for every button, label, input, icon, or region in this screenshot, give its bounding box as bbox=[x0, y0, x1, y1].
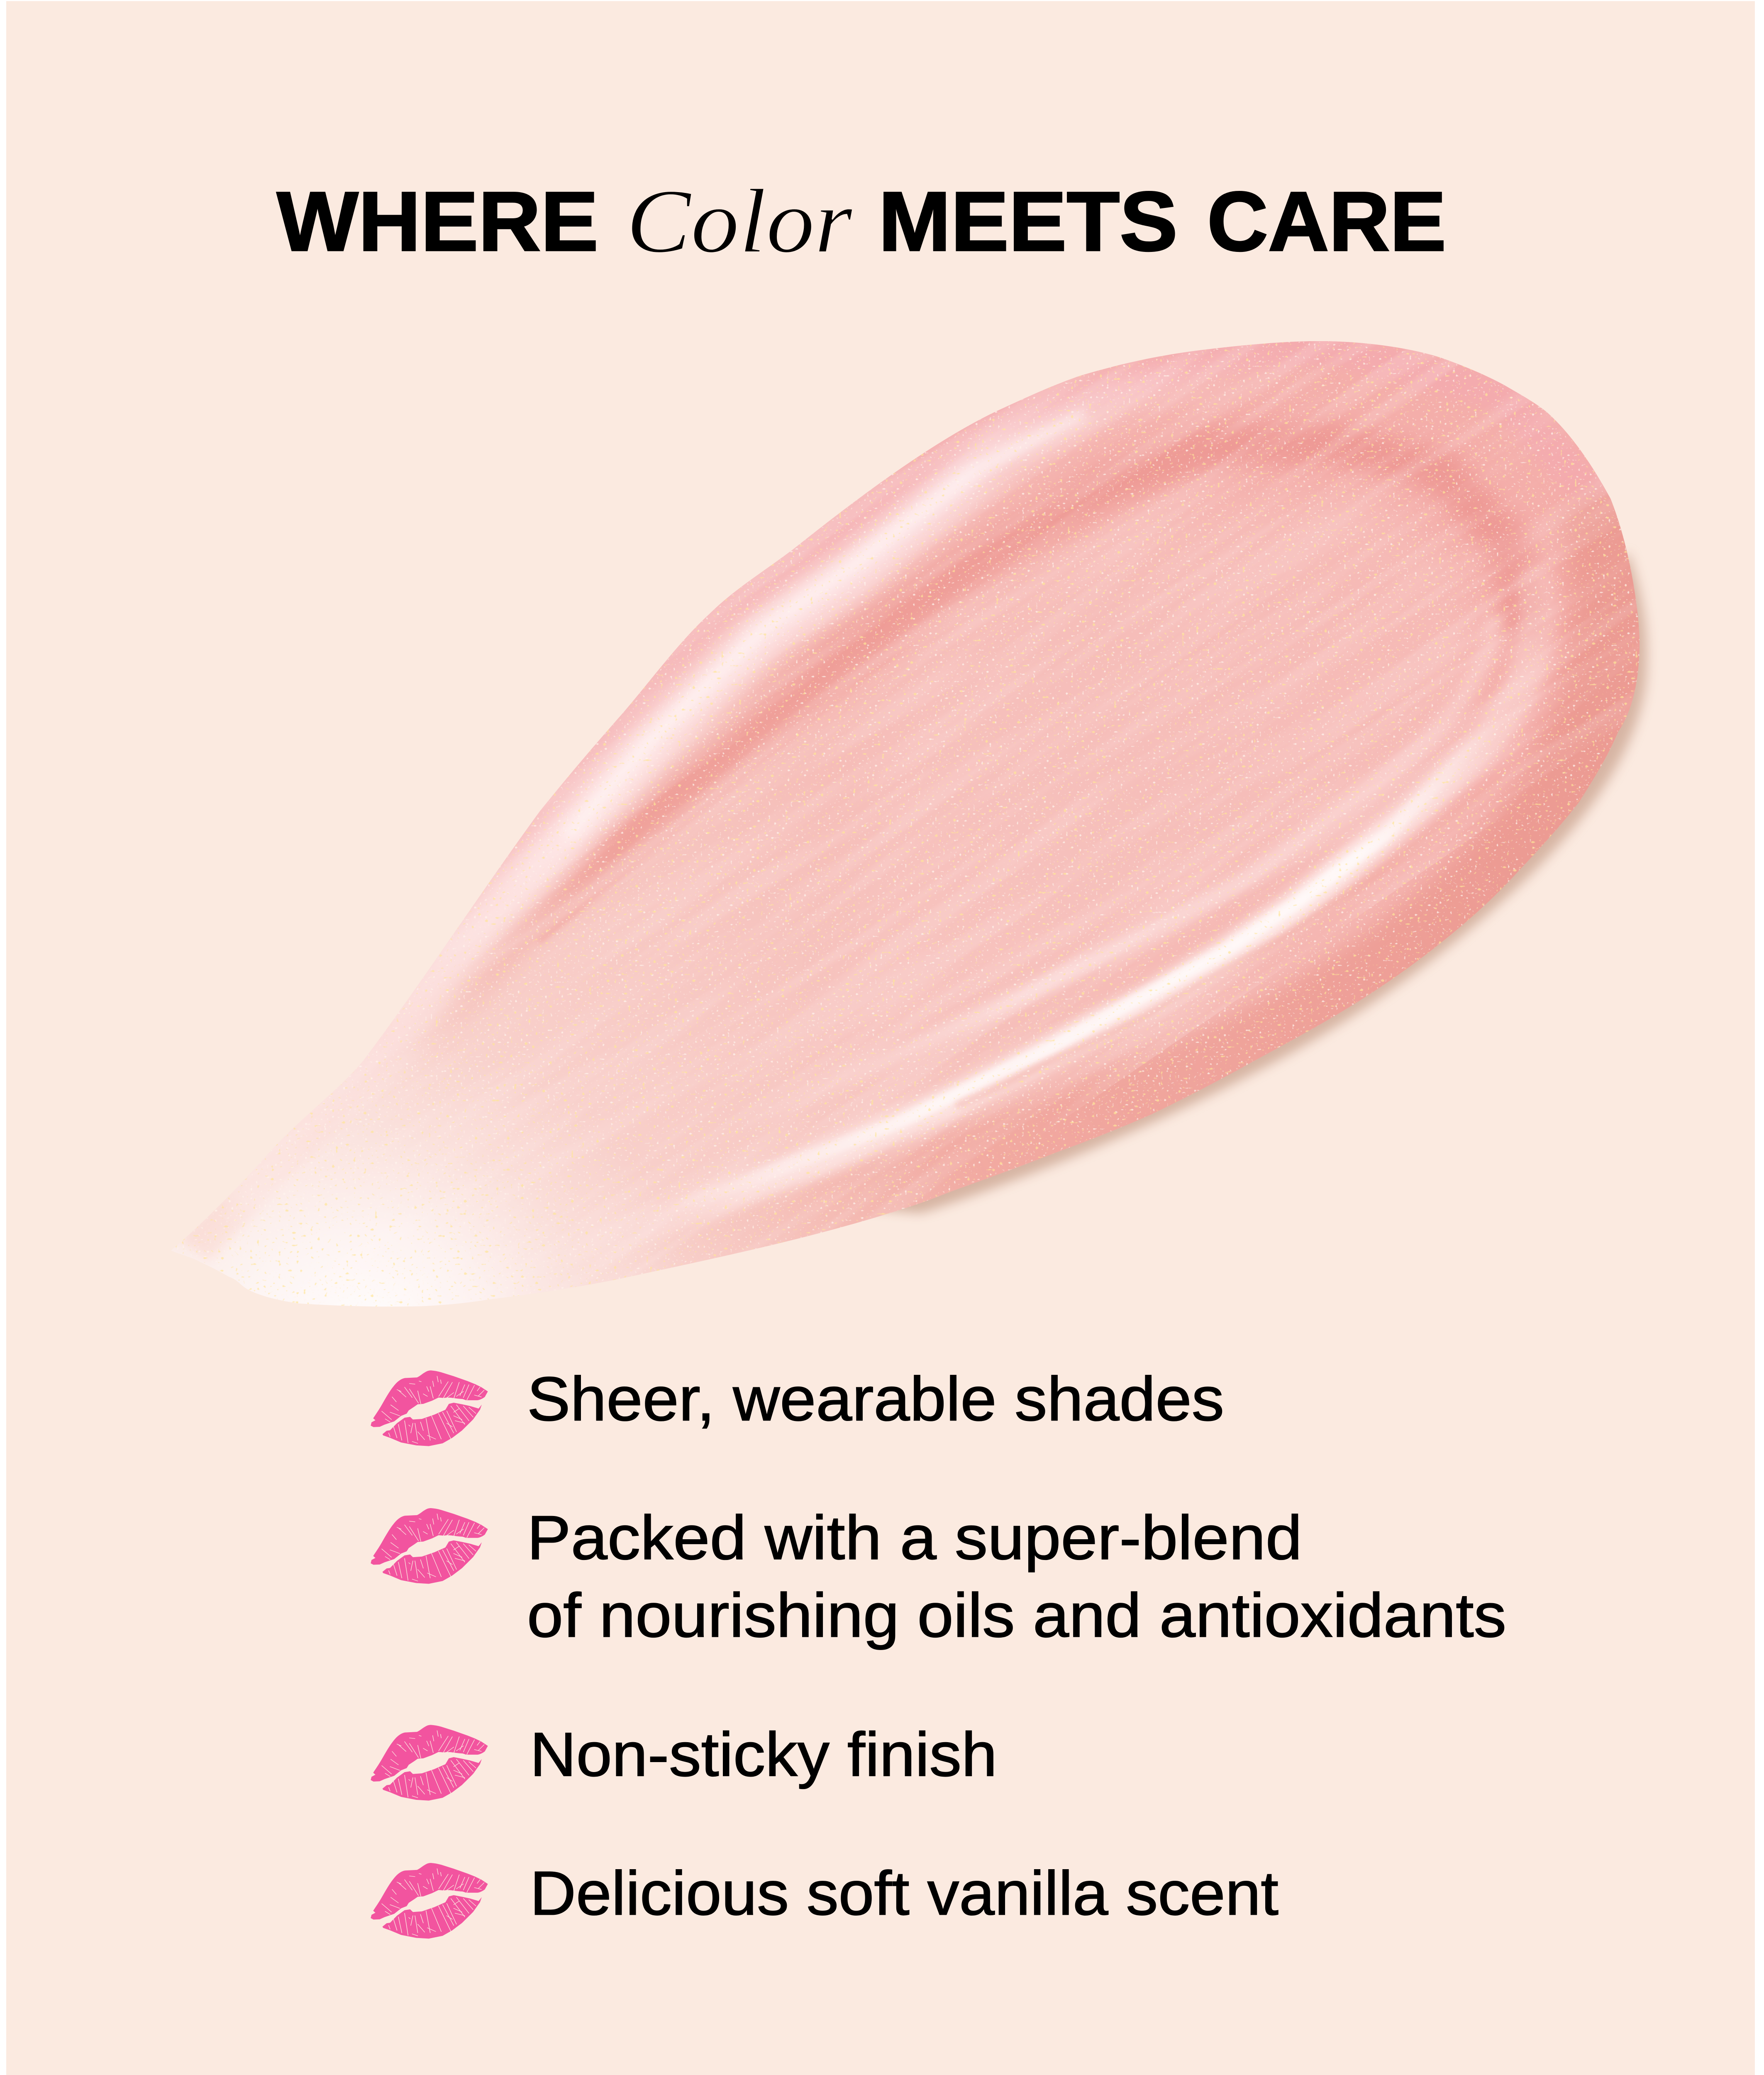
gold glitter bbox=[150, 331, 1649, 1317]
title: WHERE bbox=[277, 174, 598, 269]
feature: non-sticky bbox=[371, 1719, 997, 1801]
text: Sheer, wearable shades bbox=[527, 1364, 1224, 1433]
swatch shadow bbox=[757, 550, 1647, 1213]
text: of nourishing oils and antioxidants bbox=[527, 1580, 1506, 1650]
white glitter bbox=[150, 331, 1649, 1317]
title: MEETS bbox=[878, 174, 1178, 269]
icon: lips bbox=[371, 1370, 488, 1446]
right-to-lower ridge highlight bbox=[585, 582, 1538, 1250]
text: Delicious soft vanilla scent bbox=[530, 1858, 1278, 1928]
icon: lips bbox=[371, 1508, 488, 1584]
icon: lips bbox=[371, 1863, 488, 1938]
second inner ridge highlight bbox=[750, 622, 1494, 1125]
outer rim bbox=[195, 347, 1605, 1250]
title: Color bbox=[626, 171, 853, 272]
white tip fade bbox=[150, 1032, 780, 1317]
groove band bbox=[398, 443, 1527, 1079]
lip gloss swatch bbox=[171, 341, 1653, 1306]
feature: vanilla scent bbox=[371, 1858, 1278, 1938]
title: CARE bbox=[1207, 174, 1446, 269]
title bbox=[277, 171, 1446, 272]
upper highlight core bbox=[570, 417, 1080, 834]
upper highlight bbox=[247, 371, 1350, 1191]
text: Non-sticky finish bbox=[530, 1719, 997, 1789]
lower highlight core bbox=[690, 721, 1500, 1204]
groove crease line bbox=[540, 505, 1114, 941]
ridge shadow line bbox=[960, 781, 1500, 1105]
inner pool tint bbox=[840, 494, 1478, 1059]
swatch body bbox=[171, 341, 1640, 1306]
text: Packed with a super-blend bbox=[527, 1503, 1302, 1572]
feature: sheer shades bbox=[371, 1364, 1224, 1446]
outer right and lower rim bbox=[630, 529, 1616, 1267]
streak texture bbox=[45, 135, 1764, 1516]
icon: lips bbox=[371, 1725, 488, 1801]
feature: super-blend bbox=[371, 1503, 1506, 1650]
